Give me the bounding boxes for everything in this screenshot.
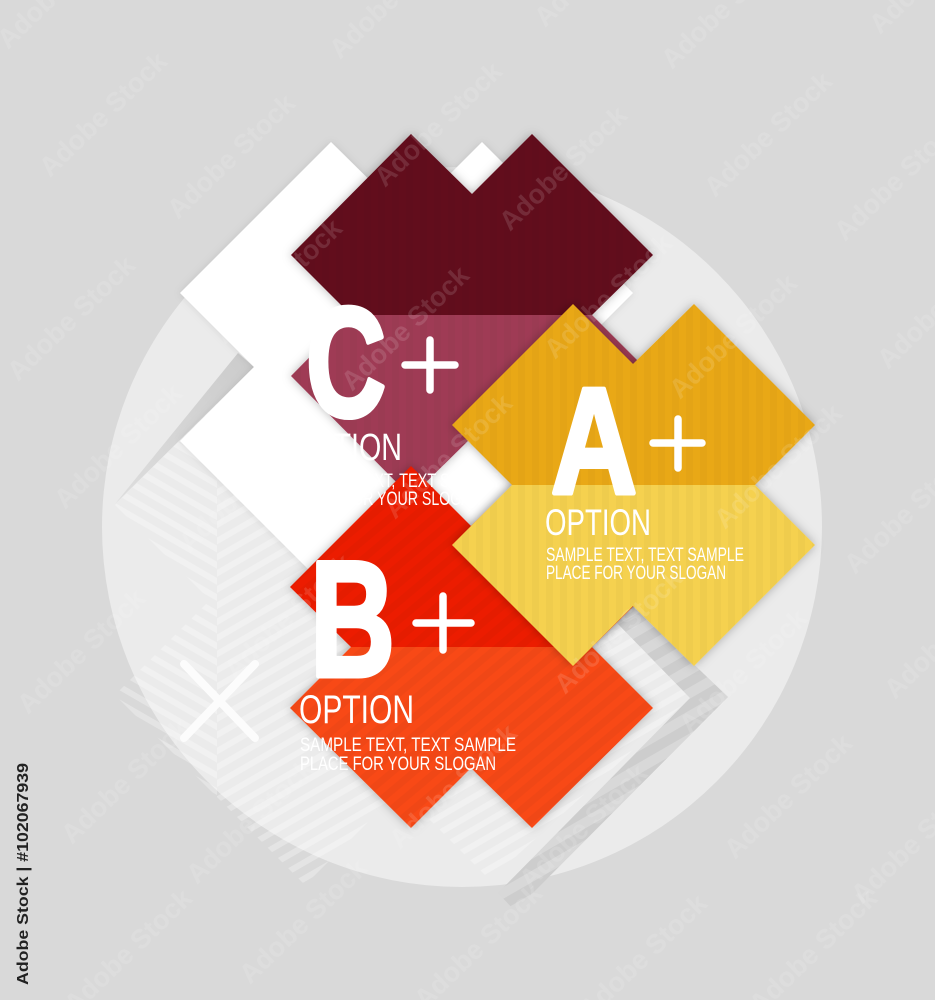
text block: C option: PLACE FOR YOUR SLOGAN xyxy=(293,489,481,510)
white X backing shape xyxy=(180,142,633,592)
watermark: Adobe Stock xyxy=(378,387,519,524)
watermark: Adobe Stock xyxy=(218,547,359,684)
heading: C plus: C xyxy=(306,276,386,450)
large pale circle xyxy=(102,167,822,887)
watermark: Adobe Stock xyxy=(11,582,152,719)
watermark: Adobe Stock xyxy=(663,267,804,404)
text block: C option xyxy=(292,427,499,510)
watermark: Adobe Stock xyxy=(208,212,349,349)
watermark: Adobe Stock xyxy=(161,87,302,224)
grey striped band xyxy=(498,606,728,911)
watermark: Adobe Stock xyxy=(538,227,679,364)
watermark: Adobe Stock xyxy=(673,602,814,739)
watermark: Adobe Stock xyxy=(173,420,314,557)
text block: A option xyxy=(545,502,744,584)
text block: B option: SAMPLE TEXT, TEXT SAMPLE xyxy=(300,735,516,756)
heading: B plus: B xyxy=(310,527,395,711)
watermark: Adobe Stock xyxy=(180,752,321,889)
watermark: Adobe Stock xyxy=(55,712,196,849)
text block: B option xyxy=(299,688,516,775)
watermark: Adobe Stock xyxy=(335,259,476,396)
text block: B option: OPTION xyxy=(299,688,414,732)
grey striped X shape xyxy=(120,676,328,882)
watermark: Adobe Stock xyxy=(718,727,859,864)
panel: C option xyxy=(291,134,653,497)
text block: C option: OPTION xyxy=(292,427,402,469)
watermark: Adobe Stock xyxy=(513,757,654,894)
panel: A option xyxy=(452,304,815,666)
watermark: Adobe Stock xyxy=(1,249,142,386)
watermark: Adobe Stock xyxy=(368,55,509,192)
text block: A option: SAMPLE TEXT, TEXT SAMPLE xyxy=(546,545,744,566)
watermark: Adobe Stock xyxy=(548,562,689,699)
watermark: Adobe Stock xyxy=(48,377,189,514)
watermark: Adobe Stock xyxy=(233,852,374,989)
text block: A option: PLACE FOR YOUR SLOGAN xyxy=(546,563,726,584)
stock image id: Adobe Stock | #102067939 xyxy=(15,763,32,985)
text block: C option: SAMPLE TEXT, TEXT SAMPLE xyxy=(293,471,499,492)
text block: A option: OPTION xyxy=(545,502,651,543)
panel: B option xyxy=(290,466,653,828)
text block: B option: PLACE FOR YOUR SLOGAN xyxy=(300,754,496,775)
grey shadow wedge xyxy=(115,353,254,504)
heading: A plus: A xyxy=(551,356,637,525)
watermark: Adobe Stock xyxy=(383,717,524,854)
watermark: Adobe Stock xyxy=(33,45,174,182)
watermark: Adobe Stock xyxy=(708,397,849,534)
watermark: Adobe Stock xyxy=(698,65,839,202)
icon: cross mark xyxy=(184,664,255,738)
watermark: Adobe Stock xyxy=(493,99,634,236)
